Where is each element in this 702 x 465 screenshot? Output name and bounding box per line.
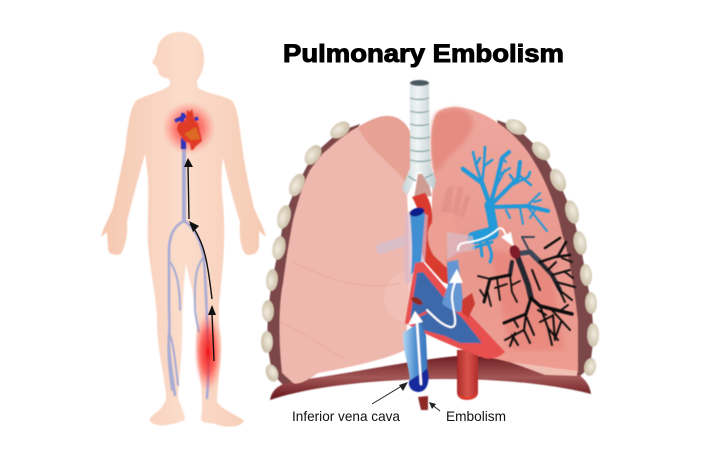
translucent lilac vessel sleeve <box>404 210 428 285</box>
pale lobe bulge near heart <box>384 271 436 323</box>
pointer arrow <box>372 382 408 404</box>
label text: Embolism <box>446 408 506 424</box>
faint vessels behind heart <box>441 186 470 218</box>
chest wall right band <box>497 120 594 378</box>
black blocked artery tree <box>478 237 575 346</box>
vena cava opening <box>409 206 425 218</box>
veins of the legs <box>168 148 208 398</box>
heart and great vessels <box>376 193 522 400</box>
trachea and bronchi <box>402 80 436 198</box>
diaphragm <box>270 355 591 400</box>
lung body <box>279 116 415 384</box>
icon: embolus fragment <box>418 396 428 410</box>
inferior vena cava <box>403 322 428 382</box>
inferior vena cava end cap <box>409 368 428 392</box>
superior vena cava <box>410 213 425 275</box>
white arrowheads <box>408 232 514 325</box>
lung body <box>431 107 578 373</box>
rib nodules <box>261 116 599 384</box>
lung upper lobe shade <box>431 108 473 172</box>
chest wall left band <box>267 124 360 386</box>
pale pulmonary trunk <box>428 215 456 268</box>
pulmonary outflow tract <box>442 260 463 312</box>
blood clot glow on calf <box>194 312 222 392</box>
pulmonary artery sleeve right <box>447 232 475 260</box>
windpipe <box>402 82 436 195</box>
label text: Inferior vena cava <box>292 408 400 424</box>
right side lung in image: pulmonary vessels <box>431 107 578 376</box>
pointer arrow <box>429 402 440 411</box>
embolus in atrium <box>410 295 424 307</box>
mediastinum shade <box>414 174 432 198</box>
left side lung in image <box>279 116 436 384</box>
lung bottom highlight <box>510 362 577 376</box>
red septum <box>406 312 427 322</box>
aorta lower opening <box>458 392 477 399</box>
red heart wall <box>405 262 505 359</box>
tracheal rings <box>408 98 433 181</box>
valve shadow <box>462 293 475 318</box>
glow around heart <box>162 101 216 155</box>
circulation arrow: calf to groin <box>188 165 214 361</box>
blue right atrium and ventricle <box>410 272 482 343</box>
icon: small heart <box>175 109 202 150</box>
embolus lodged in lung artery <box>508 244 522 260</box>
title: Pulmonary Embolism <box>283 40 564 68</box>
descending aorta <box>457 350 478 400</box>
chest wall with ribs <box>261 116 599 386</box>
human body figure <box>101 32 266 427</box>
blue pulmonary artery tree <box>463 147 548 262</box>
aortic arch <box>412 193 450 285</box>
arrowheads on circulation path <box>184 158 216 315</box>
label: inferior vena cava <box>292 382 408 424</box>
faint left pulmonary vein <box>376 236 405 254</box>
lung upper lobe <box>358 116 415 187</box>
label: embolism <box>418 396 506 424</box>
body silhouette <box>101 32 266 427</box>
trachea opening <box>410 80 429 86</box>
lung fissure <box>293 262 400 286</box>
lung lower lobe shade <box>490 250 565 350</box>
white flow arrows through heart <box>417 228 507 384</box>
